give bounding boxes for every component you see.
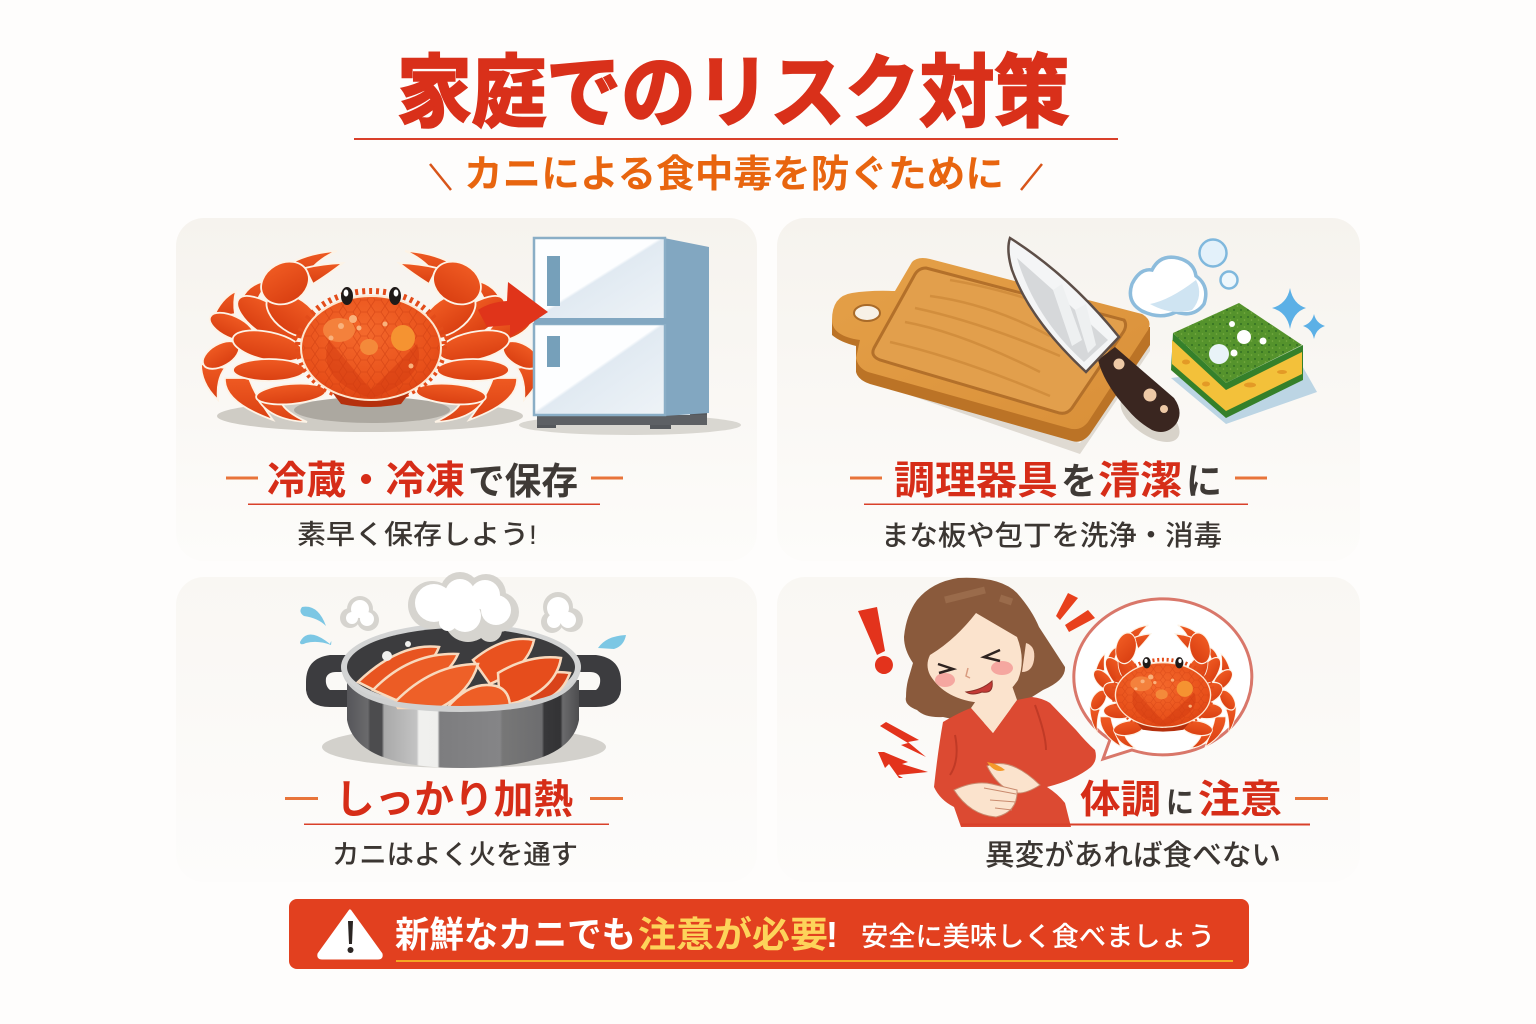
icon: refrigerator xyxy=(519,238,741,435)
icon: crab xyxy=(198,251,544,422)
heading: を xyxy=(1061,461,1097,502)
crab legs in the pot xyxy=(358,639,570,708)
heading: に xyxy=(1166,787,1194,820)
heading: 清潔 xyxy=(1098,460,1182,503)
icon: warning triangle xyxy=(319,911,381,958)
title: 家庭でのリスク対策 xyxy=(397,48,1069,137)
warning banner xyxy=(289,899,1249,969)
panel: watch your health xyxy=(777,577,1360,882)
icon: pain bolts xyxy=(878,722,928,778)
heading xyxy=(961,779,1328,826)
heading: 冷蔵・冷凍 xyxy=(267,460,465,503)
caption: 素早く保存しよう! xyxy=(297,520,537,550)
icon: knife xyxy=(1008,238,1188,451)
icon: pot xyxy=(306,623,621,768)
icon: exclamation mark xyxy=(858,607,893,674)
icon: water drops xyxy=(300,607,626,649)
heading: 調理器具 xyxy=(894,460,1058,503)
banner message: 注意が必要 xyxy=(638,914,828,955)
subtitle: カニによる食中毒を防ぐために xyxy=(464,154,1004,196)
panel: refrigerate and freeze xyxy=(176,218,757,561)
speech bubble with crab xyxy=(1074,599,1252,759)
heading: 注意 xyxy=(1198,779,1282,822)
heading: に xyxy=(1186,461,1222,502)
panel: clean utensils xyxy=(777,218,1360,561)
banner message: 新鮮なカニでも xyxy=(395,914,636,955)
panel: heat thoroughly xyxy=(176,572,757,882)
heading xyxy=(850,460,1267,505)
shadows under crab xyxy=(217,397,523,432)
caption: まな板や包丁を洗浄・消毒 xyxy=(881,520,1222,551)
icon: alert ticks xyxy=(1056,593,1095,632)
illustration: woman with stomach ache xyxy=(904,578,1096,827)
banner message: 安全に美味しく食べましょう xyxy=(861,922,1215,952)
icon: sparkles xyxy=(1272,288,1325,339)
heading xyxy=(226,460,623,505)
heading xyxy=(285,778,623,825)
icon: cutting board xyxy=(832,258,1150,454)
banner message: ! xyxy=(826,914,838,955)
caption: 異変があれば食べない xyxy=(985,839,1281,872)
banner message xyxy=(395,914,1215,955)
heading: 体調 xyxy=(1080,779,1161,822)
icon: foam and bubbles xyxy=(1130,240,1238,316)
caption: カニはよく火を通す xyxy=(332,840,578,870)
heading: で保存 xyxy=(468,461,578,502)
icon: steam xyxy=(340,572,583,642)
icon: sponge xyxy=(1171,303,1317,424)
heading: しっかり加熱 xyxy=(335,778,573,822)
arrow xyxy=(478,282,548,337)
